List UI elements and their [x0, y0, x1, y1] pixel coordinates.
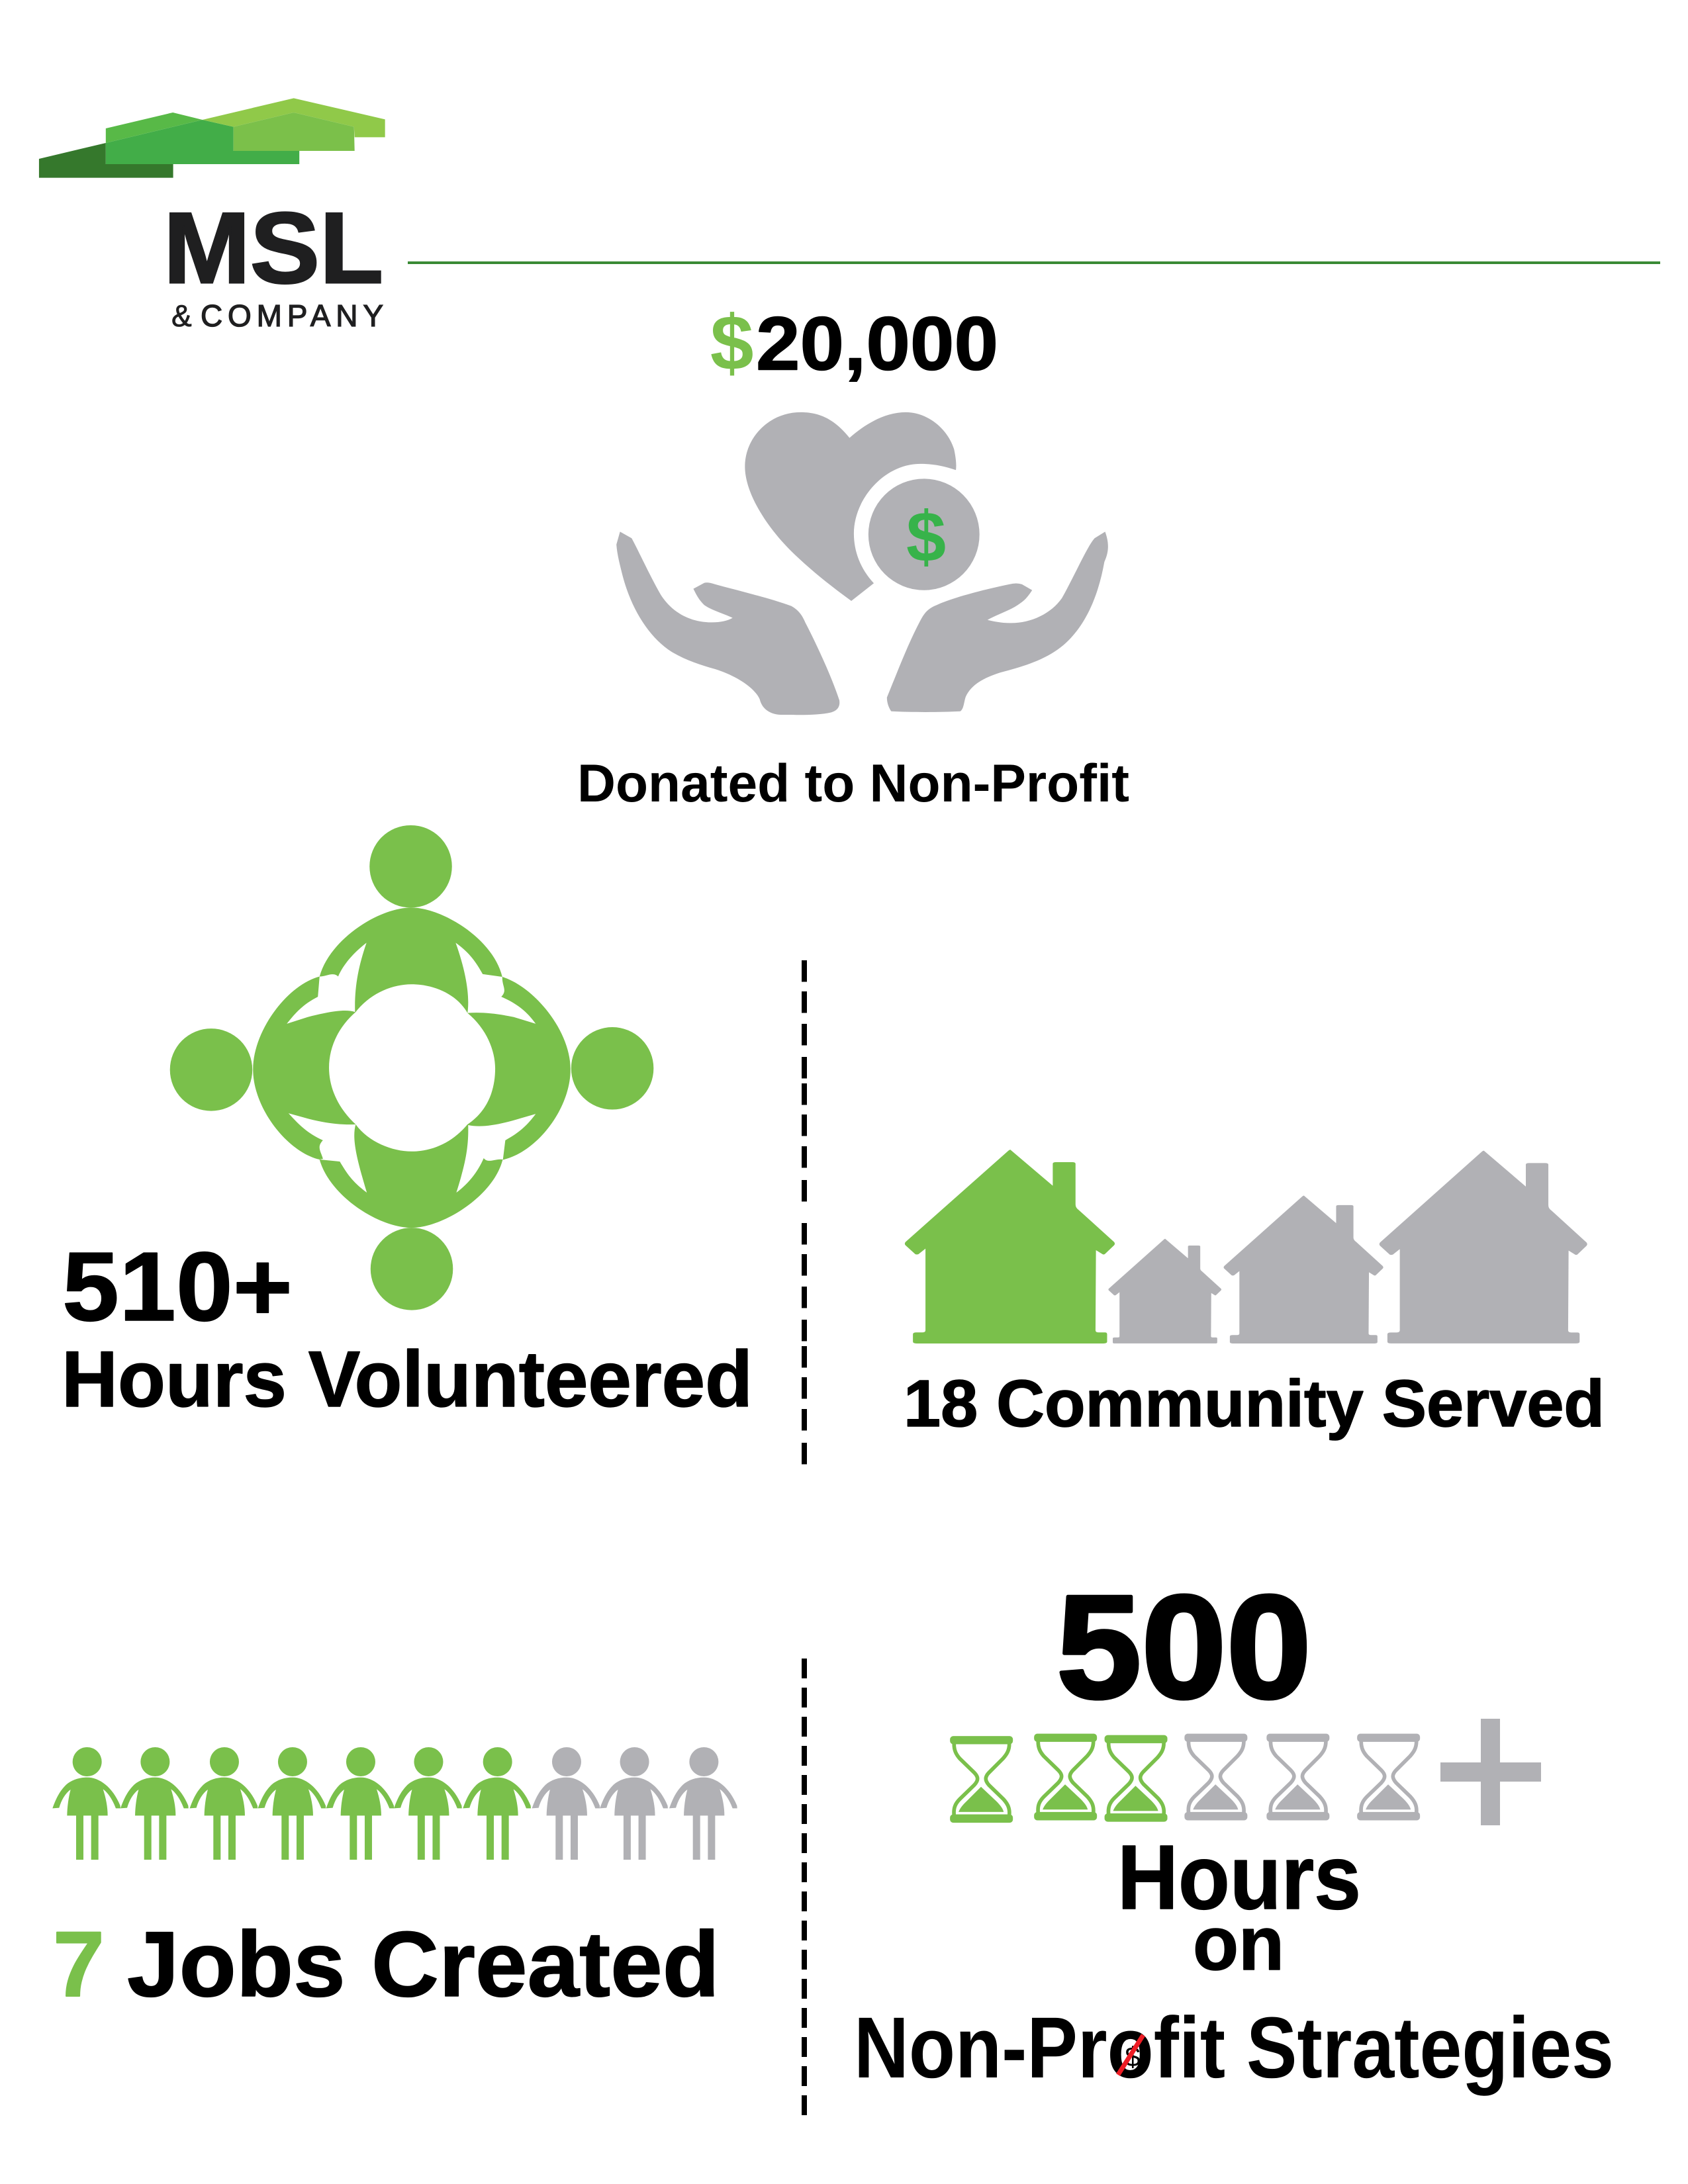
logo wordmark MSL: MSL: [164, 192, 383, 304]
stat: 500: 500: [1056, 1565, 1311, 1729]
stat: 510+: 510+: [62, 1232, 293, 1342]
panel: strategy hours: [854, 1565, 1614, 2096]
caption: Donated to Non-Profit: Donated to Non-Profit: [577, 754, 1129, 813]
stat: 7: 7: [53, 1912, 105, 2016]
panel: communities: [904, 1150, 1605, 1441]
amount: $20,000: $: [710, 300, 754, 387]
header rule: [408, 261, 1660, 264]
icon: row of ten people, seven highlighted: [52, 1747, 737, 1860]
icon: four houses: [905, 1150, 1587, 1343]
panel: volunteer hours: [62, 825, 753, 1424]
logo mark: overlapping green roofs: [39, 98, 385, 178]
panel: donation: [577, 300, 1129, 813]
caption: on: on: [1193, 1901, 1284, 1986]
amount: $20,000: 20,000: [756, 302, 998, 387]
divider: lower dashed line: [802, 1657, 807, 2115]
icon: hands holding heart and coin: $: [906, 496, 946, 576]
caption: Hours: Hours: [1117, 1827, 1361, 1929]
icon: four people in a circle: [170, 825, 653, 1310]
caption: Jobs Created: Jobs Created: [127, 1912, 720, 2016]
icon: struck-out dollar in the word Profit: [1118, 2035, 1143, 2075]
caption: 18 Community Served: 18 Community Served: [904, 1367, 1605, 1441]
panel: jobs: [52, 1747, 737, 2016]
divider: upper dashed line: [802, 960, 807, 1464]
icon: hands holding heart and coin: [616, 412, 1108, 715]
logo wordmark COMPANY: COMPANY: [201, 298, 383, 333]
icon: hourglasses and plus: [950, 1719, 1541, 1825]
icon: struck-out dollar in the word Profit: $: [1125, 2041, 1141, 2072]
logo: MSL & Company: [39, 98, 385, 333]
logo wordmark &: &: [171, 298, 192, 333]
caption: Hours Volunteered: Hours Volunteered: [62, 1335, 753, 1424]
